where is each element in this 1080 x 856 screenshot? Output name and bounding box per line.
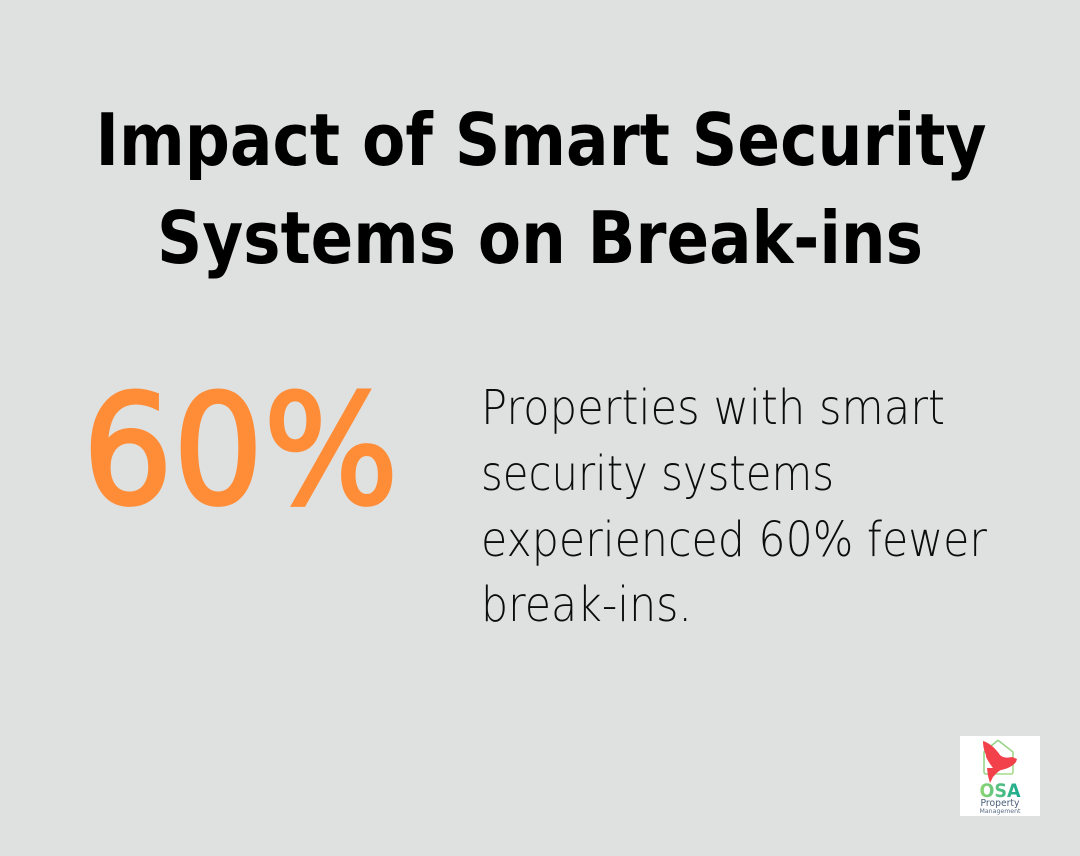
description text: Properties with smart	[481, 380, 945, 436]
title	[96, 98, 986, 280]
description text: break-ins.	[481, 577, 692, 633]
description text: experienced 60% fewer	[481, 512, 987, 568]
icon: house outline	[984, 740, 1013, 774]
logo: OSA Property Management	[960, 736, 1040, 816]
logo wordmark OSA: OSA	[980, 780, 1021, 802]
description text: security systems	[481, 446, 834, 502]
logo text Property: Property	[980, 798, 1020, 809]
logo text Management: Management	[980, 808, 1021, 815]
statistic: 60%: 60%	[82, 362, 398, 539]
description text	[481, 380, 987, 633]
title: Systems on Break-ins	[157, 196, 923, 280]
icon: red bird	[983, 741, 1017, 783]
